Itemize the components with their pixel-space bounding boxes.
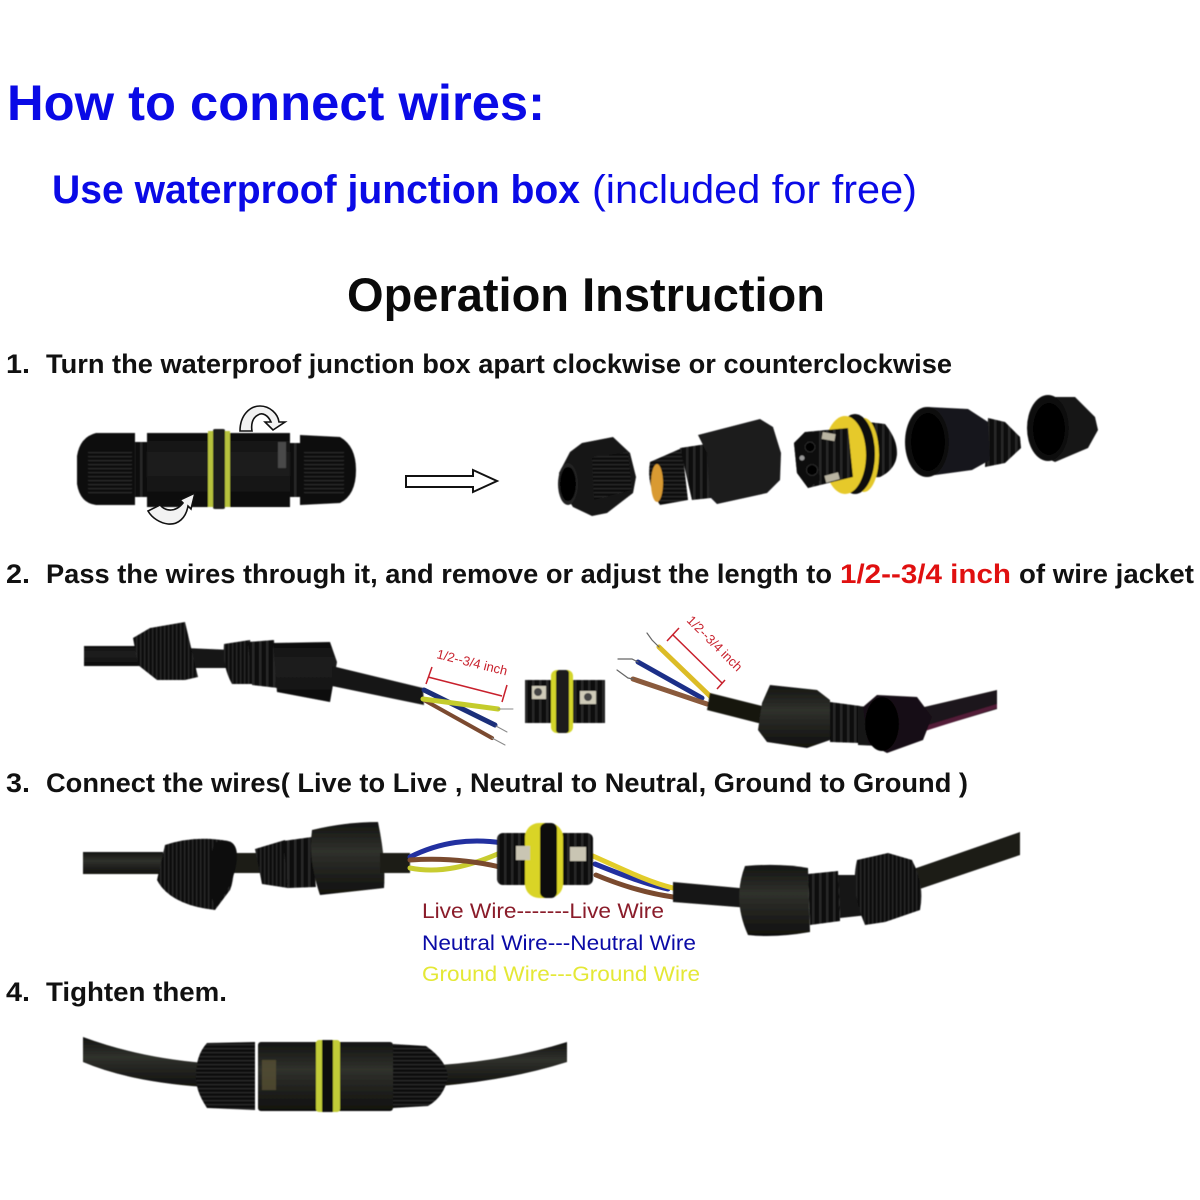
icon: rotate arrow bottom	[148, 493, 195, 524]
step 3 illustration: right cable assembly	[673, 832, 1020, 936]
step 2 text: of wire jacket	[1019, 559, 1194, 589]
step 4 text: 4.	[6, 977, 30, 1007]
step 2 illustration: left cable assembly	[84, 622, 424, 705]
measure label right	[667, 613, 746, 689]
step 2 text: 1/2--3/4 inch	[840, 559, 1011, 589]
wire colour legend: Neutral Wire---Neutral Wire	[422, 932, 696, 955]
subtitle: (included for free)	[592, 168, 917, 212]
part: body with thread	[649, 419, 781, 505]
step 1 illustration: assembled connector	[77, 429, 356, 509]
step 2 text: 2.	[6, 559, 30, 589]
step 1 text: Turn the waterproof junction box apart clockwise or counterclockwise	[46, 349, 952, 379]
wires centre right	[593, 856, 673, 897]
terminal block with yellow ring	[497, 823, 593, 898]
step 2 text: Pass the wires through it, and remove or adjust the length to	[46, 559, 832, 589]
wires centre left	[410, 841, 503, 870]
measure label left	[426, 646, 509, 702]
wire colour legend	[422, 900, 700, 986]
step 1 text: 1.	[6, 349, 30, 379]
part: threaded sleeve	[905, 407, 1021, 477]
step 1 illustration: exploded connector parts	[558, 395, 1098, 516]
terminal block	[525, 670, 605, 733]
part: gland nut	[558, 437, 636, 516]
step 4 illustration: tightened connector	[83, 1037, 567, 1112]
subtitle	[52, 168, 917, 212]
measure label right: 1/2--3/4 inch	[684, 613, 746, 674]
icon: rotate arrow top	[240, 406, 285, 431]
wires left	[423, 690, 513, 745]
wires right	[617, 633, 712, 704]
step 3 text: Connect the wires( Live to Live , Neutral to Neutral, Ground to Ground )	[46, 768, 968, 798]
wire colour legend: Live Wire-------Live Wire	[422, 900, 664, 923]
step 2 text	[6, 559, 1194, 589]
part: centre terminal with yellow ring	[794, 414, 897, 494]
arrow: hollow right arrow	[406, 470, 497, 492]
part: end cap	[1027, 395, 1098, 462]
subtitle: Use waterproof junction box	[52, 168, 580, 212]
title: How to connect wires:	[7, 75, 545, 131]
wire colour legend: Ground Wire---Ground Wire	[422, 963, 700, 986]
step 3 text: 3.	[6, 768, 30, 798]
step 2 illustration: right cable assembly	[707, 685, 997, 753]
measure label left: 1/2--3/4 inch	[435, 646, 509, 678]
step 3 illustration: left cable assembly	[83, 822, 410, 910]
heading: operation instruction: Operation Instruction	[347, 268, 825, 321]
step 4 text: Tighten them.	[46, 977, 227, 1007]
